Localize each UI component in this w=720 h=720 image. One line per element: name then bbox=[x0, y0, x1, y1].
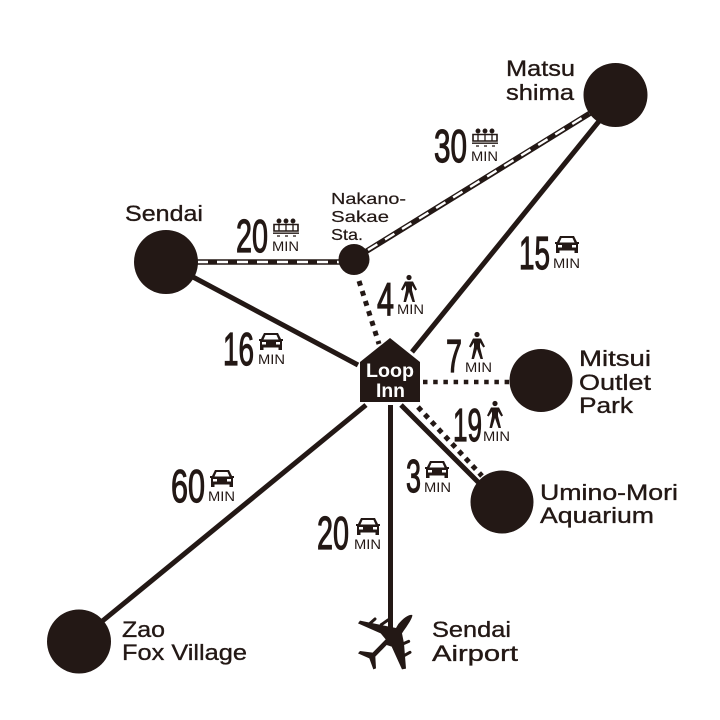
time: 16 min by car: 16 bbox=[223, 323, 254, 375]
label: Matsushima bbox=[506, 56, 575, 105]
time: 3 min by car: MIN bbox=[424, 480, 451, 495]
label: Sendai Airport bbox=[432, 617, 518, 666]
time: 30 min by train: MIN bbox=[471, 149, 498, 164]
node: Zao Fox Village bbox=[47, 610, 111, 674]
route: Loop Inn to Sendai Airport by car bbox=[388, 405, 393, 628]
time: 7 min on foot bbox=[446, 330, 492, 382]
time: 16 min by car: MIN bbox=[258, 352, 285, 367]
label: Umino-Mori Aquarium bbox=[540, 480, 678, 528]
time: 60 min by car: 60 bbox=[171, 460, 205, 512]
node: Matsushima bbox=[584, 63, 648, 127]
label: Umino-Mori Aquarium: Umino-Mori bbox=[540, 480, 678, 505]
route: Loop Inn to Zao Fox Village by car bbox=[100, 405, 366, 623]
route: Loop Inn to Matsushima by car bbox=[412, 120, 600, 352]
time: 20 min by train: MIN bbox=[272, 239, 299, 254]
time: 19 min on foot: 19 bbox=[453, 399, 482, 451]
route: Loop Inn to Sendai by car bbox=[193, 277, 358, 365]
label: Zao Fox Village: Zao bbox=[122, 617, 165, 642]
time: 7 min on foot: MIN bbox=[465, 360, 492, 375]
time: 3 min by car bbox=[406, 450, 451, 502]
time: 20 min by train: 20 bbox=[236, 210, 268, 262]
icon: Loop Inn house: Loop bbox=[366, 361, 414, 382]
label: Sendai Airport: Airport bbox=[432, 641, 518, 666]
node: Sendai bbox=[134, 230, 198, 294]
time: 7 min on foot: 7 bbox=[446, 330, 462, 382]
time: 30 min by train: 30 bbox=[434, 120, 467, 172]
label: Matsushima: shima bbox=[506, 80, 575, 105]
label: Mitsui Outlet Park: Outlet bbox=[579, 370, 651, 395]
time: 20 min by car: MIN bbox=[354, 537, 381, 552]
route: Loop Inn to Aquarium on foot bbox=[418, 407, 482, 476]
label: Matsushima: Matsu bbox=[506, 56, 575, 81]
time: 4 min on foot: 4 bbox=[377, 273, 394, 325]
label: Umino-Mori Aquarium: Aquarium bbox=[540, 503, 654, 528]
node: Umino-Mori Aquarium bbox=[470, 470, 534, 534]
label: Nakano-Sakae Sta.: Sta. bbox=[331, 227, 363, 244]
route: Loop Inn to Mitsui Outlet Park on foot bbox=[423, 380, 510, 384]
route: Loop Inn to Nakano-Sakae Sta. on foot bbox=[359, 281, 379, 344]
label: Mitsui Outlet Park: Mitsui bbox=[579, 346, 651, 371]
label: Nakano-Sakae Sta. bbox=[331, 191, 406, 244]
node: Mitsui Outlet Park bbox=[510, 349, 572, 412]
time: 4 min on foot: MIN bbox=[397, 302, 424, 317]
icon: Loop Inn house bbox=[360, 338, 420, 402]
label: Sendai: Sendai bbox=[125, 201, 203, 226]
time: 15 min by car: 15 bbox=[519, 227, 550, 279]
label: Mitsui Outlet Park: Park bbox=[579, 393, 634, 418]
time: 60 min by car: MIN bbox=[208, 489, 235, 504]
time: 15 min by car: MIN bbox=[553, 256, 580, 271]
node: Nakano-Sakae Sta. bbox=[338, 244, 370, 275]
time: 3 min by car: 3 bbox=[406, 450, 421, 502]
icon: Loop Inn house: Inn bbox=[376, 381, 405, 402]
label: Sendai Airport: Sendai bbox=[432, 617, 511, 642]
label: Mitsui Outlet Park bbox=[579, 346, 651, 418]
time: 19 min on foot: MIN bbox=[483, 429, 510, 444]
rail: Nakano-Sakae Sta. to Matsushima bbox=[362, 112, 592, 254]
label: Zao Fox Village bbox=[122, 617, 247, 665]
rail: Sendai to Nakano-Sakae Sta. bbox=[190, 259, 345, 265]
label: Zao Fox Village: Fox Village bbox=[122, 640, 247, 665]
time: 20 min by car: 20 bbox=[317, 507, 349, 559]
icon: airplane bbox=[358, 615, 412, 669]
label: Nakano-Sakae Sta.: Nakano- bbox=[331, 191, 406, 208]
time: 4 min on foot bbox=[377, 273, 424, 325]
label: Nakano-Sakae Sta.: Sakae bbox=[331, 209, 389, 226]
route: Loop Inn to Aquarium by car bbox=[401, 405, 488, 492]
